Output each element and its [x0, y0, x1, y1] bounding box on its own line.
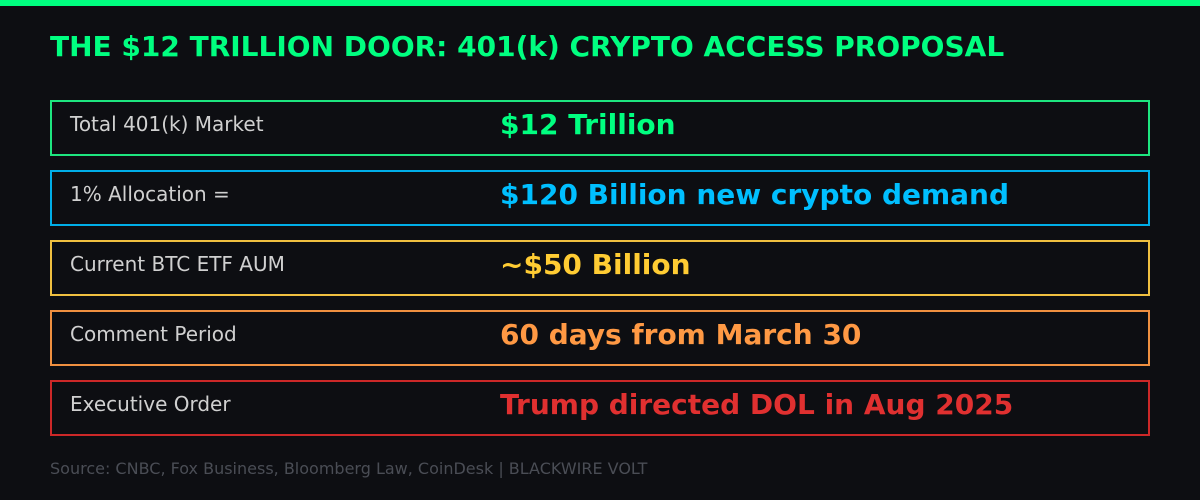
row: BTC ETF [50, 240, 1150, 296]
row: executive order: Executive Order [70, 392, 231, 416]
row: comment period [50, 310, 1150, 366]
row: executive order [50, 380, 1150, 436]
row: BTC ETF: Current BTC ETF AUM [70, 252, 285, 276]
row: comment period: Comment Period [70, 322, 237, 346]
row: comment period: 60 days from March 30 [500, 318, 861, 351]
row: total market: $12 Trillion [500, 108, 676, 141]
row: allocation: $120 Billion new crypto demand [500, 178, 1009, 211]
row: BTC ETF: ~$50 Billion [500, 248, 691, 281]
row: allocation: 1% Allocation = [70, 182, 230, 206]
title: THE $12 TRILLION DOOR: 401(k) CRYPTO ACCESS PROPOSAL [50, 30, 1004, 63]
row: total market: Total 401(k) Market [70, 112, 264, 136]
row: allocation [50, 170, 1150, 226]
source: Source: CNBC, Fox Business, Bloomberg Law, CoinDesk | BLACKWIRE VOLT [50, 459, 647, 478]
row: executive order: Trump directed DOL in Aug 2025 [500, 388, 1013, 421]
row: total market [50, 100, 1150, 156]
